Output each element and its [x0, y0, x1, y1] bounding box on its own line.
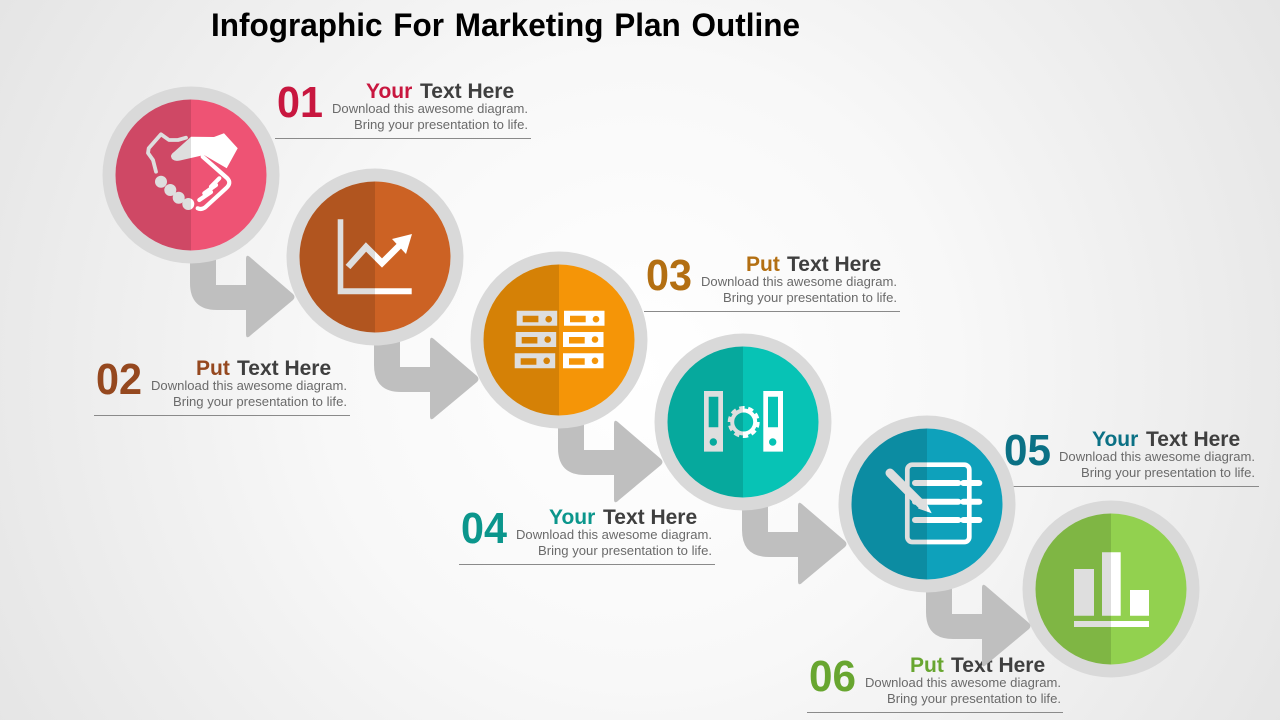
text block 03: Download this awesome diagram.	[701, 274, 897, 289]
text block 04: 04	[461, 504, 507, 553]
icon: server racks	[515, 311, 604, 368]
text block 02	[94, 355, 350, 416]
text block 01: Your	[366, 80, 412, 103]
text block 02: Download this awesome diagram.	[151, 378, 347, 393]
text block 03: Put	[746, 253, 780, 276]
icon: binders and gear	[704, 391, 783, 452]
text block 03: 03	[646, 251, 692, 300]
text block 02: Put	[196, 357, 230, 380]
text block 04	[459, 504, 715, 564]
text block 06: Download this awesome diagram.	[865, 675, 1061, 690]
arrow 5 to 6	[926, 584, 1030, 666]
text block 03	[644, 251, 900, 312]
icon: bar chart	[1074, 552, 1149, 627]
text block 02: Bring your presentation to life.	[173, 394, 347, 409]
circle 6: bar chart	[1022, 500, 1200, 678]
text block 05: Bring your presentation to life.	[1081, 465, 1255, 480]
icon: line chart	[338, 219, 412, 294]
text block 01: Download this awesome diagram.	[332, 101, 528, 116]
text block 05: Your	[1092, 428, 1138, 451]
text block 01: 01	[277, 78, 323, 127]
arrow 4 to 5	[742, 502, 846, 584]
circle 5: notebook and pencil	[838, 416, 1016, 592]
text block 02: Text Here	[237, 357, 331, 380]
text block 03: Bring your presentation to life.	[723, 290, 897, 305]
icon: handshake	[148, 133, 238, 210]
circle 4: binders and gear	[654, 334, 832, 510]
text block 05: Download this awesome diagram.	[1059, 449, 1255, 464]
arrow 1 to 2	[190, 255, 294, 337]
arrow 2 to 3	[374, 337, 478, 419]
text block 06: Text Here	[951, 654, 1045, 677]
text block 06: Put	[910, 654, 944, 677]
text block 06: Bring your presentation to life.	[887, 691, 1061, 706]
text block 02: 02	[96, 355, 142, 404]
circle 1: handshake	[102, 86, 280, 264]
text block 04: Bring your presentation to life.	[538, 543, 712, 558]
text block 01: Bring your presentation to life.	[354, 117, 528, 132]
icon: notebook	[890, 465, 979, 542]
circle 2: growth chart	[286, 168, 464, 346]
circle 3: server racks	[470, 252, 648, 428]
text block 04: Text Here	[603, 506, 697, 529]
title: Infographic For Marketing Plan Outline	[211, 7, 800, 43]
text block 01	[275, 78, 531, 138]
text block 06: 06	[809, 652, 856, 701]
text block 04: Your	[549, 506, 595, 529]
text block 01: Text Here	[420, 80, 514, 103]
arrow 3 to 4	[558, 420, 662, 502]
text block 04: Download this awesome diagram.	[516, 527, 712, 542]
text block 03: Text Here	[787, 253, 881, 276]
text block 05	[1004, 426, 1259, 486]
text block 05: Text Here	[1146, 428, 1240, 451]
text block 05: 05	[1004, 426, 1051, 475]
text block 06	[807, 652, 1063, 712]
